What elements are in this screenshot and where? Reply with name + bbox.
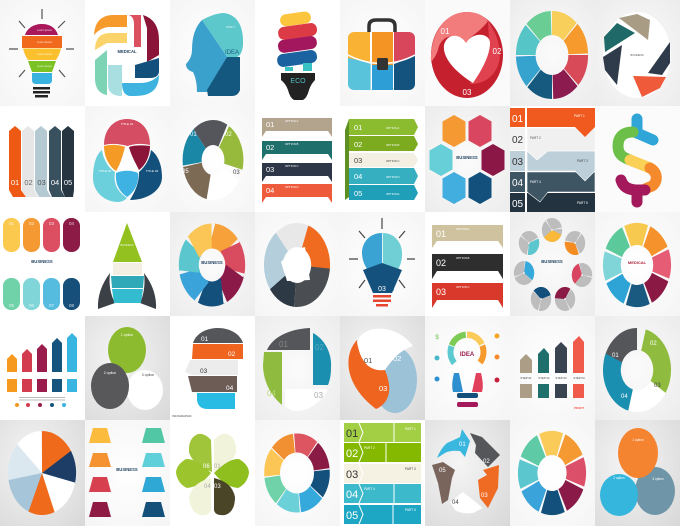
panel: rising arrow bars (0, 316, 85, 420)
bulb base (33, 87, 50, 98)
column numbers: 05 (64, 178, 72, 187)
heading: BUSINESS (116, 467, 138, 472)
option labels: OPTION D (386, 175, 400, 179)
option labels: 3 option (142, 373, 154, 377)
panel: four part ring (255, 316, 340, 420)
number 01: 01 (441, 27, 450, 36)
numbers: 04 (267, 389, 276, 398)
panel: three option circles (595, 420, 680, 526)
part labels: PART 4 (364, 487, 375, 491)
band numbers (200, 336, 236, 392)
panel: rocket (85, 212, 170, 316)
panel: shutter circle (595, 0, 680, 106)
part labels (530, 114, 588, 205)
bulb base (281, 73, 315, 100)
ribbon numbers (266, 120, 274, 195)
band numbers: 04 (226, 385, 234, 392)
bulb colour bands: Lorem ipsum (37, 52, 52, 56)
row numbers: 01 (346, 428, 358, 440)
option labels: OPTION B (456, 256, 469, 260)
row numbers: 02 (354, 140, 362, 149)
ribbon numbers: 01 (436, 229, 446, 239)
numbers (612, 341, 661, 400)
numbers (364, 354, 401, 393)
number column: 03 (512, 157, 523, 168)
part labels (364, 427, 416, 512)
option labels: OPTION C (386, 159, 400, 163)
row numbers: 02 (346, 448, 358, 460)
icon: handle (369, 20, 395, 32)
row numbers: 05 (346, 510, 358, 522)
panel: five arrow columns (0, 106, 85, 212)
titles (99, 122, 158, 173)
panel: four option ribbons (255, 106, 340, 212)
profit caption: PROFIT (574, 406, 584, 410)
panel: four step arrows (510, 316, 595, 420)
logo caption: INFOGRAPHIC (172, 414, 192, 418)
arrow numbers: 01 (459, 442, 466, 448)
pill numbers (9, 221, 74, 308)
ribbon numbers: 04 (266, 186, 274, 195)
number column: 01 (512, 114, 523, 125)
row numbers: 03 (346, 469, 358, 481)
buckle (377, 58, 388, 70)
part labels: PART 1 (574, 114, 585, 118)
part labels: PART 3 (405, 467, 416, 471)
legend lines (19, 397, 65, 400)
panel: four arrow ring (595, 316, 680, 420)
option labels: OPTION C (456, 285, 470, 289)
number 03: 03 (378, 286, 386, 293)
arrow numbers: 03 (481, 493, 488, 499)
part labels: PART 5 (577, 201, 588, 205)
heading: MEDICAL (117, 49, 137, 54)
centre heading: BUSINESS (201, 260, 223, 265)
bulb base pills (457, 393, 478, 407)
row numbers: 04 (354, 172, 362, 181)
row numbers: 01 (354, 123, 362, 132)
ribbon numbers: 03 (266, 165, 274, 174)
heading: BUSINESS (541, 259, 563, 264)
ribbon numbers: 02 (436, 258, 446, 268)
numbers: 01 (612, 353, 619, 359)
panel: three option ribbons (425, 212, 510, 316)
column numbers: 02 (24, 178, 33, 187)
legend icons (15, 403, 66, 407)
row numbers (346, 428, 358, 522)
ribbon numbers (436, 229, 446, 297)
panel: three option blobs (85, 316, 170, 420)
centre label: BUSINESS (630, 53, 644, 57)
label: idea: IDEA (225, 50, 239, 56)
panel: puzzle ring (170, 212, 255, 316)
numbers: 03 (379, 384, 387, 393)
panel: green part rows (340, 420, 425, 526)
panel: eight segment wheel (510, 0, 595, 106)
number 02: 02 (493, 47, 502, 56)
option labels: 3 option (652, 477, 664, 481)
option labels: OPTION C (285, 164, 299, 168)
panel: blue light bulb (340, 212, 425, 316)
numbers: 02 (650, 341, 657, 347)
part labels: PART 5 (405, 508, 416, 512)
number 03: 03 (463, 88, 472, 97)
step labels: STEP 01 (520, 376, 532, 380)
option labels: 1 option (121, 333, 133, 337)
column numbers (11, 178, 72, 187)
step labels: STEP 04 (573, 376, 585, 380)
row numbers: 05 (354, 189, 362, 198)
option labels: OPTION A (285, 119, 298, 123)
base bars (373, 295, 391, 306)
icon squares (7, 379, 77, 392)
arrow numbers (439, 442, 490, 506)
panel: business idea bulb (425, 316, 510, 420)
panel: pentagon ring (255, 212, 340, 316)
petal numbers: 03 (214, 484, 221, 490)
step labels: STEP 03 (555, 376, 567, 380)
label: eco: ECO (290, 78, 306, 85)
option labels: OPTION A (456, 227, 469, 231)
row numbers (354, 123, 362, 198)
numbers (267, 340, 324, 400)
row numbers: 03 (354, 156, 362, 165)
option labels (613, 438, 664, 481)
panel: head steps (170, 0, 255, 106)
pill numbers: 07 (49, 303, 54, 308)
step labels (520, 376, 585, 380)
side icons: $ (435, 335, 439, 341)
panel: dollar sign puzzle (595, 106, 680, 212)
numbers: 02 (315, 343, 324, 352)
panel: medical infographic (85, 0, 170, 106)
titles: TITLE 02 (99, 169, 111, 173)
numbers: 01 (364, 356, 372, 365)
panel: circular arrows (425, 420, 510, 526)
arrow numbers: 02 (483, 459, 490, 465)
icon squares (520, 384, 584, 398)
part labels: PART 1 (405, 427, 416, 431)
pill numbers: 05 (9, 303, 14, 308)
panel: hexagons (425, 106, 510, 212)
bulb colour bands: Lorem ipsum (37, 64, 52, 68)
petal numbers (203, 464, 221, 490)
panel: five blob ring (170, 106, 255, 212)
band numbers: 02 (228, 351, 236, 358)
part labels: PART 2 (530, 136, 541, 140)
column numbers: 01 (11, 178, 19, 187)
column numbers: 04 (51, 178, 59, 187)
number column: 02 (512, 135, 523, 146)
numbers: 02 (393, 354, 401, 363)
pill numbers: 02 (29, 221, 34, 226)
ring numbers: 04 (207, 194, 214, 200)
numbers: 01 (279, 340, 288, 349)
part labels: PART 4 (530, 180, 541, 184)
petal numbers: 06 (203, 464, 210, 470)
ribbon numbers: 02 (266, 143, 274, 152)
option labels: 2 option (104, 371, 116, 375)
numbers: 04 (621, 394, 628, 400)
numbers: 03 (654, 383, 661, 389)
bulb colour bands (22, 24, 62, 84)
panel: eight pills (0, 212, 85, 316)
icon: bulb rays (9, 9, 74, 77)
pill numbers: 08 (69, 303, 74, 308)
number column: 04 (512, 178, 523, 189)
option labels (456, 227, 470, 289)
column numbers: 03 (37, 178, 46, 187)
panel: medical wheel (595, 212, 680, 316)
ring numbers (182, 132, 240, 200)
panel: briefcase (340, 0, 425, 106)
panel: heart ring (425, 0, 510, 106)
panel: venn titles (85, 106, 170, 212)
number column (510, 108, 525, 212)
panel: rainbow light bulb (0, 0, 85, 106)
step labels: STEP 02 (538, 376, 550, 380)
option labels (386, 126, 400, 196)
part labels: PART 3 (577, 159, 588, 163)
panel: stacked option arrows (340, 106, 425, 212)
part labels: PART 2 (364, 446, 375, 450)
ring numbers: 01 (190, 132, 197, 138)
bulb colour bands: Lorem ipsum (37, 28, 52, 32)
panel: eco spiral bulb (255, 0, 340, 106)
option labels (104, 333, 154, 377)
option labels: OPTION E (386, 192, 399, 196)
panel: head bands (170, 316, 255, 420)
option labels: OPTION B (386, 143, 399, 147)
ring numbers: 03 (233, 170, 240, 176)
option labels: OPTION A (386, 126, 399, 130)
heading: MEDICAL (628, 260, 647, 265)
option labels: OPTION B (285, 142, 298, 146)
ribbon numbers: 01 (266, 120, 274, 129)
heading: BUSINESS (31, 259, 53, 264)
rocket label: BUSINESS (120, 243, 134, 247)
titles: TITLE 01 (121, 122, 133, 126)
option labels: OPTION D (285, 185, 299, 189)
arrow numbers: 04 (452, 500, 459, 506)
ribbon numbers: 03 (436, 287, 446, 297)
heading: BUSINESS (456, 155, 478, 160)
panel: yin yang (340, 316, 425, 420)
panel: eight block ring (510, 420, 595, 526)
bulb colour bands: Lorem ipsum (37, 40, 52, 44)
band numbers: 01 (201, 336, 209, 343)
ring numbers: 05 (182, 169, 189, 175)
arrow numbers: 05 (439, 468, 446, 474)
pill numbers: 01 (9, 221, 14, 226)
pill numbers: 04 (69, 221, 74, 226)
titles: TITLE 03 (146, 169, 158, 173)
number column: 05 (512, 199, 523, 210)
petal numbers: 04 (204, 484, 211, 490)
panel: octagon shutter (255, 420, 340, 526)
heart shape (444, 35, 490, 83)
panel: pie chart (0, 420, 85, 526)
panel: six petal clover (170, 420, 255, 526)
ring numbers: 02 (225, 132, 232, 138)
chevron dividers (359, 423, 394, 524)
row numbers: 04 (346, 489, 358, 501)
pill numbers: 06 (29, 303, 34, 308)
step 1 text: STEP 1 (226, 25, 235, 29)
petal numbers: 01 (214, 464, 221, 470)
inner pentagon (281, 247, 310, 281)
panel: five part rows (510, 106, 595, 212)
bulb neck (452, 373, 483, 392)
panel: seven small donuts (510, 212, 595, 316)
band numbers: 03 (200, 368, 208, 375)
option labels (285, 119, 299, 189)
numbers: 03 (314, 391, 323, 400)
panel: eight trapezoids (85, 420, 170, 526)
option labels: 2 option (613, 476, 625, 480)
option labels: 1 option (632, 438, 644, 442)
pill numbers: 03 (49, 221, 54, 226)
icon: rays (349, 218, 415, 288)
centre heading: IDEA (460, 352, 475, 358)
